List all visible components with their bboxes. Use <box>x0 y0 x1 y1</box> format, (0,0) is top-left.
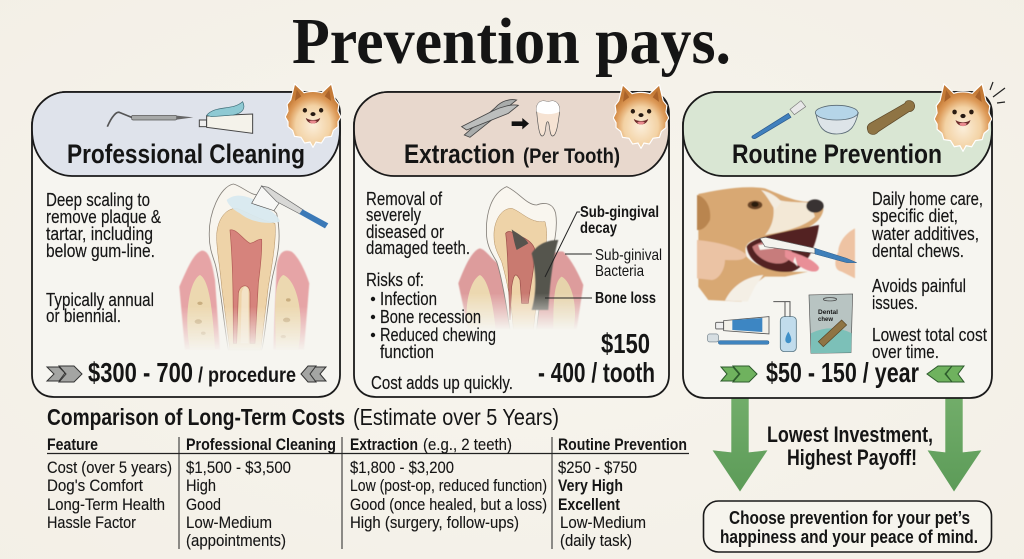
text: description: tartar, including <box>46 224 153 244</box>
column headers: Routine Prevention <box>558 435 687 454</box>
extraction column: High (surgery, follow-ups) <box>350 513 519 532</box>
title: Prevention pays. <box>292 5 731 78</box>
text: description: severely <box>366 205 421 225</box>
professional cleaning column <box>186 458 291 550</box>
routine prevention column: (daily task) <box>560 531 632 550</box>
callout box: closing message: Choose prevention for your pet’s <box>729 508 970 528</box>
text: description: diseased or <box>366 222 444 242</box>
heading: Extraction <box>404 139 515 169</box>
callout: lowest investment: Highest Payoff! <box>787 445 917 470</box>
header band <box>32 92 340 176</box>
callout: lowest investment: Lowest Investment, <box>767 422 933 447</box>
labels: tooth call-outs: Sub-gingival <box>580 204 659 221</box>
panel: extraction <box>354 86 669 397</box>
text: home care: water additives, <box>871 224 979 244</box>
icon: home care products <box>708 294 853 353</box>
text: description: Deep scaling to <box>46 190 150 210</box>
routine prevention column: Very High <box>558 476 623 495</box>
heading: (Per Tooth) <box>523 145 620 168</box>
row labels <box>47 458 172 532</box>
text: home care: dental chews. <box>872 241 964 261</box>
price row <box>47 357 326 388</box>
icon: green chevrons right <box>927 366 964 382</box>
labels: tooth call-outs: Bone loss <box>595 290 656 307</box>
arrow: right green arrow <box>927 397 982 492</box>
text: dental chew bag label: Dental <box>818 310 838 316</box>
text: description <box>366 189 470 258</box>
text: risks list: Risks of: <box>366 270 424 290</box>
illustration: dog having teeth brushed <box>697 187 857 302</box>
extraction column: Low (post-op, reduced function) <box>350 476 547 495</box>
routine prevention column: $250 - $750 <box>558 458 637 477</box>
column headers: (e.g., 2 teeth) <box>423 435 512 454</box>
icon: green chevrons left <box>721 366 757 382</box>
price row: $300 - 700 <box>88 357 193 388</box>
text: description: below gum-line. <box>46 241 155 261</box>
professional cleaning column: High <box>186 476 216 495</box>
card outline <box>32 92 340 397</box>
text: description <box>46 190 161 261</box>
callout box: closing message <box>704 501 992 552</box>
icon: dog head <box>614 86 668 147</box>
heading <box>404 139 620 169</box>
arrow: left green arrow <box>712 397 768 492</box>
professional cleaning column: Good <box>186 495 221 514</box>
row labels: Cost (over 5 years) <box>47 458 172 477</box>
row labels: Hassle Factor <box>47 513 136 532</box>
header band <box>683 92 992 176</box>
text: risks list: Bone recession <box>380 307 481 327</box>
routine prevention column <box>558 458 646 550</box>
price <box>538 328 655 388</box>
panel: routine prevention <box>683 82 1005 398</box>
text: frequency: Typically annual <box>46 290 154 310</box>
table: comparison of long-term costs <box>47 404 689 550</box>
text: description: damaged teeth. <box>366 238 470 258</box>
routine prevention column: Excellent <box>558 495 620 514</box>
text: risks list: Reduced chewing <box>380 325 496 345</box>
icon: dog head <box>286 85 340 146</box>
text: avoids pain: Avoids painful <box>872 276 966 296</box>
text: home care <box>871 189 983 261</box>
text: risks list: function <box>380 342 434 362</box>
table heading: (Estimate over 5 Years) <box>353 404 559 430</box>
panel: professional cleaning <box>32 85 340 397</box>
text: home care: specific diet, <box>872 206 958 226</box>
illustration: tooth being brushed <box>179 184 328 350</box>
price: $150 <box>601 328 650 359</box>
column headers: Professional Cleaning <box>186 435 336 454</box>
text: avoids pain <box>872 276 966 313</box>
icon: chevrons left <box>47 366 82 382</box>
table rules <box>47 437 689 549</box>
labels: tooth call-outs: Bacteria <box>595 263 644 280</box>
callout: lowest investment <box>767 422 933 470</box>
column headers: Feature <box>47 435 98 454</box>
text: cost note: Cost adds up quickly. <box>371 373 513 393</box>
routine prevention column: Low-Medium <box>560 513 646 532</box>
column headers <box>47 435 687 454</box>
text: lowest cost: Lowest total cost <box>872 325 987 345</box>
text: frequency <box>46 290 154 326</box>
card outline <box>354 92 669 397</box>
row labels: Dog's Comfort <box>47 476 143 495</box>
heading: Professional Cleaning <box>67 139 305 169</box>
header band <box>354 92 669 176</box>
text: lowest cost: over time. <box>872 342 939 362</box>
table heading <box>47 404 559 430</box>
icon: forceps and tooth <box>462 100 560 137</box>
column headers: Extraction <box>350 435 418 454</box>
extraction column <box>350 458 547 532</box>
icon: dog head with sparkle <box>935 82 1005 150</box>
row labels: Long-Term Health <box>47 495 165 514</box>
labels: tooth call-outs: Sub-ginival <box>595 247 662 264</box>
labels: tooth call-outs: decay <box>580 220 617 237</box>
text: risks list <box>366 270 496 362</box>
price: - 400 / tooth <box>538 357 655 388</box>
text: description: Removal of <box>366 189 443 209</box>
icon: brush, bowl and chew <box>752 101 915 139</box>
text: frequency: or biennial. <box>46 306 121 326</box>
text: home care: Daily home care, <box>872 189 983 209</box>
labels: tooth call-outs <box>545 204 662 307</box>
table heading: Comparison of Long-Term Costs <box>47 404 345 430</box>
heading: Routine Prevention <box>732 139 942 169</box>
callout box: closing message: happiness and your peace of mind. <box>720 527 978 547</box>
professional cleaning column: Low-Medium <box>186 513 272 532</box>
text: avoids pain: issues. <box>872 293 918 313</box>
icon: dental instruments <box>107 102 253 133</box>
professional cleaning column: (appointments) <box>186 531 286 550</box>
illustration: decayed tooth <box>458 187 583 330</box>
professional cleaning column: $1,500 - $3,500 <box>186 458 291 477</box>
text: dental chew bag label: chew <box>818 317 833 323</box>
extraction column: Good (once healed, but a loss) <box>350 495 547 514</box>
extraction column: $1,800 - $3,200 <box>350 458 454 477</box>
text: risks list: Infection <box>380 289 437 309</box>
text: description: remove plaque & <box>46 207 161 227</box>
icon: chevrons right <box>301 366 326 382</box>
price row: / procedure <box>198 364 296 387</box>
price row: $50 - 150 / year <box>766 357 919 388</box>
text: lowest cost <box>872 325 987 362</box>
card outline <box>683 92 992 398</box>
text: dental chew bag label <box>818 310 838 323</box>
